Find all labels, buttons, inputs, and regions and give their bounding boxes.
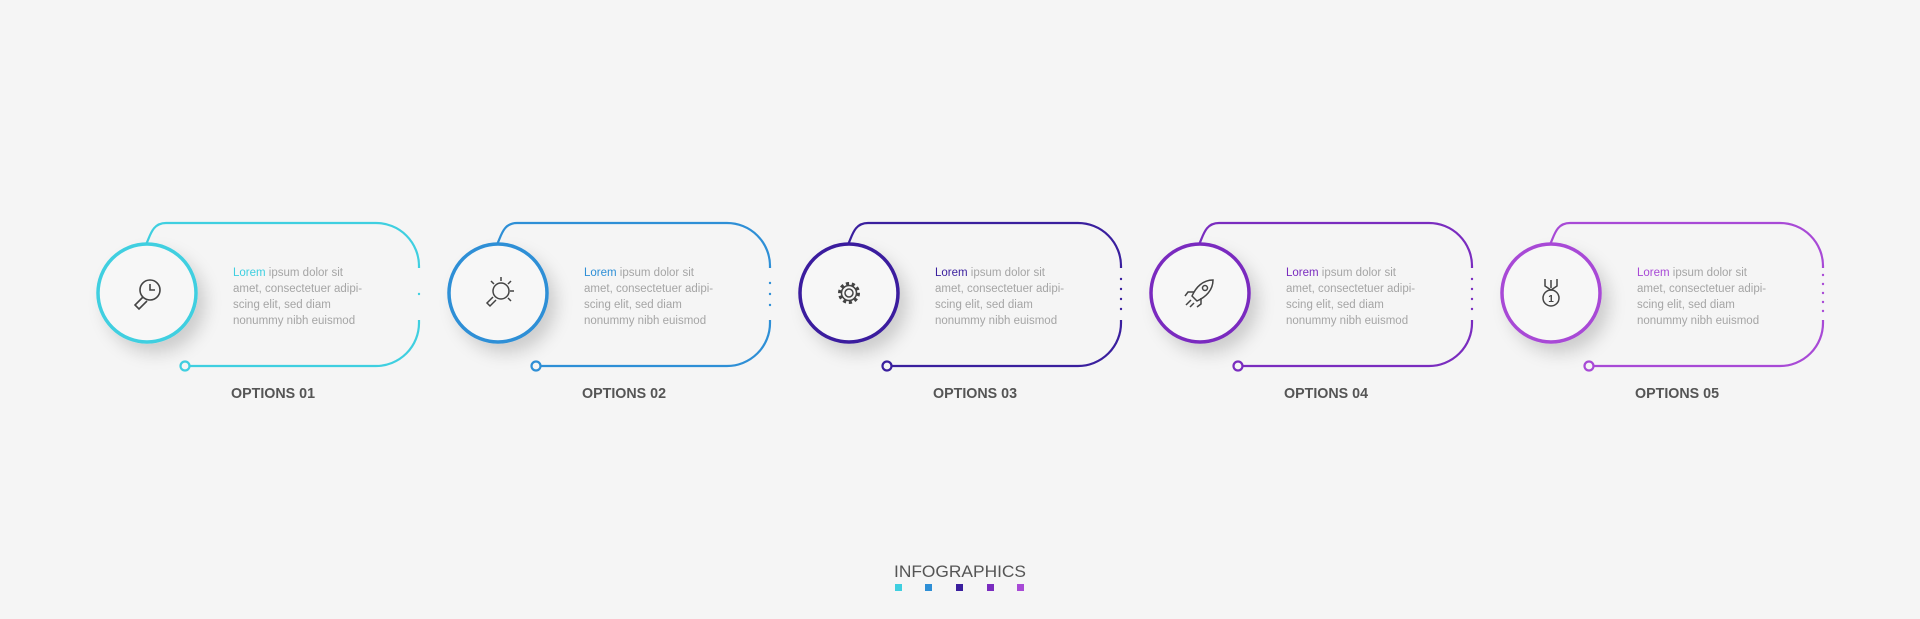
label: OPTIONS 05	[1635, 385, 1719, 402]
circle badge	[449, 244, 547, 342]
text block: nonummy nibh euismod	[1637, 315, 1759, 327]
label: OPTIONS 04	[1284, 385, 1369, 402]
icon: light bulb	[487, 277, 514, 306]
label: OPTIONS 02	[582, 385, 666, 402]
option 04	[1151, 223, 1473, 402]
text block: Lorem ipsum dolor sit	[584, 267, 694, 279]
option 03	[800, 223, 1122, 402]
text block: nonummy nibh euismod	[935, 315, 1057, 327]
text block: nonummy nibh euismod	[584, 315, 706, 327]
text block: amet, consectetuer adipi-	[233, 283, 362, 295]
connector frame	[144, 223, 419, 370]
label: OPTIONS 03	[933, 385, 1017, 402]
text block: Lorem ipsum dolor sit	[1637, 267, 1747, 279]
connector frame	[1548, 223, 1823, 370]
text block: scing elit, sed diam	[584, 299, 682, 311]
circle badge	[800, 244, 898, 342]
connector frame	[495, 223, 770, 370]
option 01	[98, 223, 420, 402]
text block: scing elit, sed diam	[935, 299, 1033, 311]
circle badge	[1151, 244, 1249, 342]
icon: rocket	[1185, 280, 1213, 307]
circle badge	[98, 244, 196, 342]
icon: search clock	[135, 280, 160, 309]
text block: scing elit, sed diam	[1637, 299, 1735, 311]
circle badge	[1502, 244, 1600, 342]
connector frame	[846, 223, 1121, 370]
label: OPTIONS 01	[231, 385, 315, 402]
icon: medal: 1	[1548, 294, 1554, 305]
option 05	[1502, 223, 1824, 402]
icon: medal	[1543, 279, 1559, 306]
legend squares	[895, 584, 1024, 591]
text block: nonummy nibh euismod	[1286, 315, 1408, 327]
text block: scing elit, sed diam	[233, 299, 331, 311]
icon: gear	[840, 284, 858, 302]
text block: amet, consectetuer adipi-	[1286, 283, 1415, 295]
text block: Lorem ipsum dolor sit	[1286, 267, 1396, 279]
text block: amet, consectetuer adipi-	[1637, 283, 1766, 295]
text block: Lorem ipsum dolor sit	[233, 267, 343, 279]
text block: Lorem ipsum dolor sit	[935, 267, 1045, 279]
text block: nonummy nibh euismod	[233, 315, 355, 327]
title: INFOGRAPHICS: INFOGRAPHICS	[894, 562, 1026, 581]
text block: scing elit, sed diam	[1286, 299, 1384, 311]
option 02	[449, 223, 771, 402]
text block: amet, consectetuer adipi-	[584, 283, 713, 295]
text block: amet, consectetuer adipi-	[935, 283, 1064, 295]
connector frame	[1197, 223, 1472, 370]
